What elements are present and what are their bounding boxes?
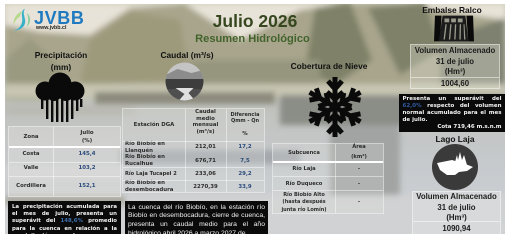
row tucapel: Río Laja Tucapel 2 [125,170,177,176]
volumen laja value [413,221,500,235]
value costa: 145,4 [78,151,96,157]
icon: lake circle [432,144,478,190]
table: precipitación [8,126,121,197]
header julio: Julio [80,130,94,136]
icon: river landscape circle [166,62,204,100]
heading: precipitación [35,50,87,72]
value río laja: - [358,166,360,172]
table: caudal [122,108,265,193]
volumen ralco label: 31 de julio [436,56,474,66]
header área: (km²) [351,154,367,160]
row valle: Valle [24,165,38,171]
title: Julio 2026 [213,11,297,31]
row río duqueco: Río Duqueco [286,180,322,186]
volumen laja label [416,192,497,222]
icon: rain cloud [36,72,84,122]
panel: volumen laja [412,191,501,234]
header diferencia: Qmm - Qn [231,118,259,124]
difference llanquén: 17,2 [238,144,252,150]
value desembocadura: 2270,39 [193,184,218,190]
header área [351,143,367,160]
header diferencia: Diferencia [231,112,259,118]
header caudal medio: Caudal [195,109,216,115]
header diferencia [230,112,260,124]
header caudal medio [193,109,218,135]
volumen ralco value: 1004,60 [441,79,469,88]
header zona: Zona [23,134,39,140]
volumen laja label: 31 de julio [437,202,476,212]
volumen laja label: Volumen Almacenado [416,192,497,201]
callout: ralco [399,94,505,132]
row río laja: Río Laja [292,166,316,172]
logo wordmark: JVBB [34,8,84,28]
value río biobío alto: - [358,199,360,205]
header caudal medio: medio [196,116,215,122]
icon: logo swirl [14,8,30,30]
callout ralco text: Presenta un superávit del 62,0% respecto del volumen normal acumulado para el mes de julio. [402,96,502,123]
logo url: www.jvbb.cl [36,25,66,31]
value rucalhue: 676,71 [195,158,216,164]
volumen ralco label: Volumen Almacenado [415,46,495,55]
heading: precipitación: Precipitación [35,50,87,60]
header caudal medio: mensual [193,122,218,128]
value cordillera: 152,1 [78,183,96,189]
volumen laja value: 1090,94 [442,224,471,233]
row río biobío alto: junta río Lomín) [281,206,327,212]
row río biobío alto: Río Biobío Alto [283,192,325,198]
row llanquén: Río Biobío en Llanquén [125,140,165,154]
header julio [80,130,94,144]
header julio: (%) [82,138,92,144]
row cordillera: Cordillera [16,183,46,189]
volumen ralco label: (Hm³) [445,67,465,76]
row rucalhue: Río Biobío en Rucalhue [125,154,165,166]
logo JVBB [14,8,84,31]
volumen laja label: (Hm³) [446,213,467,222]
icon: snowflake [308,77,362,137]
panel: volumen ralco [410,44,500,89]
header caudal medio: (m³/s) [196,129,215,135]
heading: caudal: Caudal (m³/s) [160,50,214,60]
difference desembocadura: 33,9 [238,184,252,190]
difference tucapel: 29,2 [238,170,252,176]
value río duqueco: - [358,180,360,186]
volumen ralco value [411,77,499,90]
value llanquén: 212,01 [195,144,216,150]
heading: lago laja: Lago Laja [435,134,475,144]
heading: cobertura de nieve: Cobertura de Nieve [291,60,367,70]
row desembocadura: Río Biobío en desembocadura [125,180,173,192]
value tucapel: 233,06 [195,170,216,176]
row costa: Costa [22,151,40,157]
value valle: 103,2 [78,165,96,171]
header porcentaje: % [242,130,248,136]
header área: Área [352,144,366,150]
header subcuenca: Subcuenca [288,150,320,156]
row río biobío alto [281,192,327,212]
heading: embalse ralco: Embalse Ralco [422,4,482,14]
icon: dam [434,16,474,42]
row río biobío alto: (hasta después [282,199,326,205]
difference rucalhue: 7,5 [240,158,250,164]
cota ralco: Cota 719,46 m.s.n.m [437,124,502,130]
subtitle: Resumen Hidrológico [195,33,310,45]
heading: precipitación: (mm) [51,62,71,72]
table: cobertura de nieve [272,143,384,214]
volumen ralco label [414,46,495,76]
header estación: Estación DGA [134,122,174,128]
